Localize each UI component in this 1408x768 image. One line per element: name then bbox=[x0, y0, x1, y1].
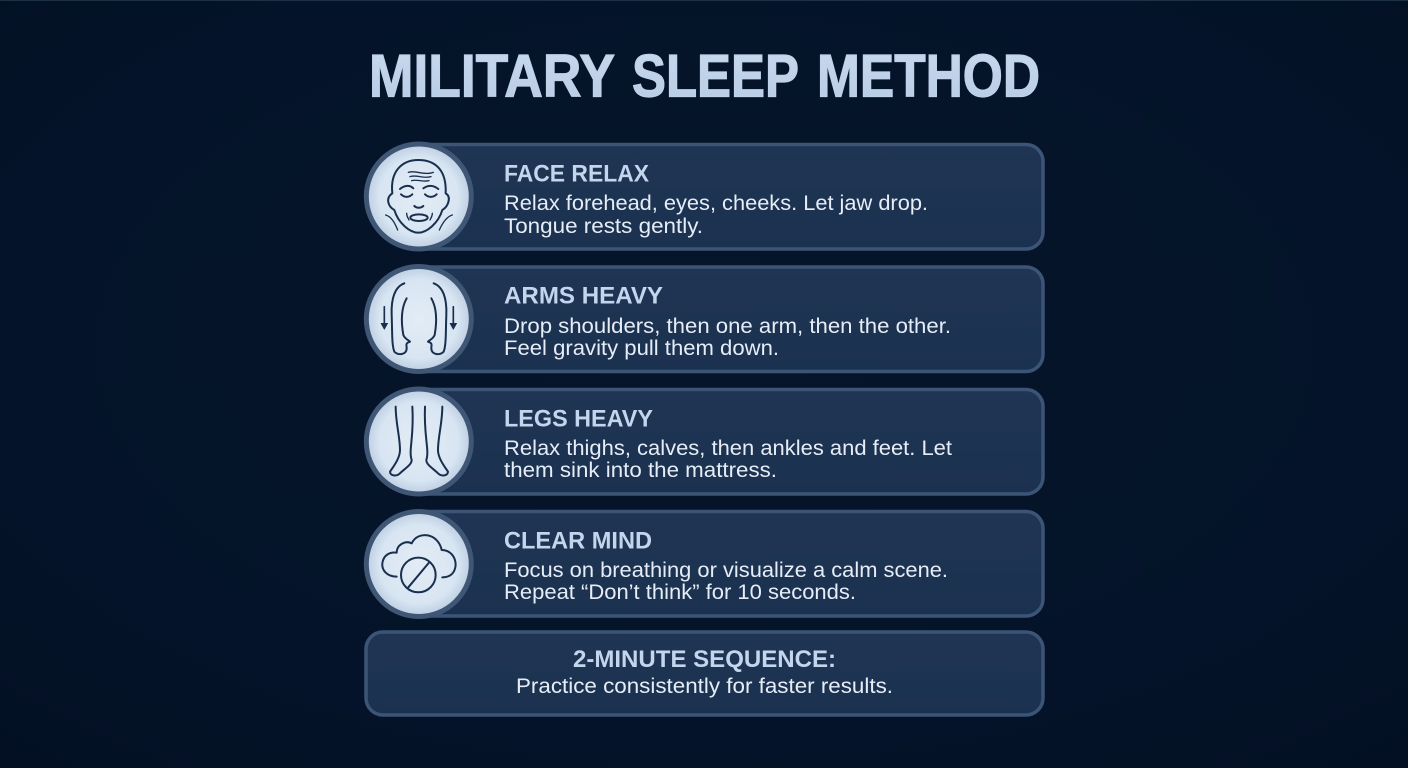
icon: heavy arms bbox=[366, 266, 471, 372]
icon: cloud with prohibition sign bbox=[366, 512, 471, 616]
text: face relax description: Tongue rests gently. bbox=[504, 215, 703, 238]
title: MILITARY bbox=[369, 42, 615, 110]
text: arms heavy description: Feel gravity pull them down. bbox=[504, 337, 779, 360]
panel: arms heavy bbox=[366, 266, 1043, 372]
text: arms heavy description: Drop shoulders, then one arm, then the other. bbox=[504, 315, 951, 338]
text: face relax description: Relax forehead, eyes, cheeks. Let jaw drop. bbox=[504, 192, 928, 215]
text: practice note: Practice consistently for faster results. bbox=[516, 675, 893, 698]
heading: 2-minute sequence: 2-MINUTE SEQUENCE: bbox=[573, 646, 836, 673]
heading: clear mind: CLEAR MIND bbox=[504, 528, 652, 554]
heading: arms heavy: ARMS HEAVY bbox=[504, 282, 663, 310]
icon: relaxed face bbox=[366, 144, 471, 249]
text: clear mind description: Focus on breathing or visualize a calm scene. bbox=[504, 559, 948, 582]
text: legs heavy description: Relax thighs, calves, then ankles and feet. Let bbox=[504, 437, 952, 460]
panel: face relax bbox=[366, 144, 1043, 249]
heading: legs heavy: LEGS HEAVY bbox=[504, 406, 653, 432]
title: SLEEP bbox=[632, 42, 798, 110]
panel: legs heavy bbox=[366, 389, 1043, 494]
icon: heavy legs bbox=[366, 389, 471, 494]
title: METHOD bbox=[817, 42, 1040, 110]
panel: 2-minute sequence bbox=[366, 632, 1043, 715]
text: legs heavy description: them sink into the mattress. bbox=[504, 459, 777, 482]
panel: clear mind bbox=[366, 512, 1043, 616]
heading: face relax: FACE RELAX bbox=[504, 160, 649, 188]
text: clear mind description: Repeat “Don’t think” for 10 seconds. bbox=[504, 581, 856, 604]
